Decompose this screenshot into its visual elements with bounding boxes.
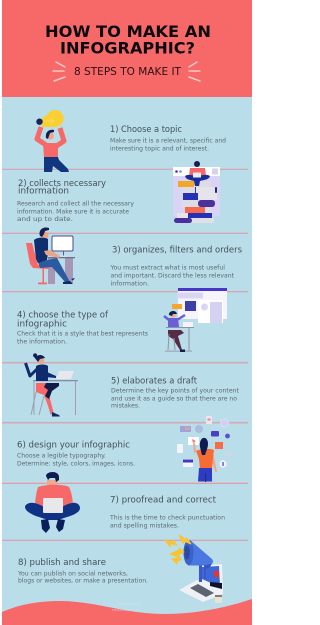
step 8 text xyxy=(17,557,148,584)
icon: person sitting cross-legged with laptop xyxy=(25,472,80,533)
title: HOW TO MAKE AN xyxy=(45,22,211,41)
step 6 text xyxy=(17,440,135,468)
watermark xyxy=(112,598,143,612)
icon: woman at laptop desk xyxy=(26,353,78,416)
step 3 text: and important. Discard the less relevant xyxy=(110,273,235,280)
step 7 text: 7) proofread and correct xyxy=(110,495,217,505)
dividers xyxy=(2,169,248,540)
step 2 text: 2) collects necessary xyxy=(18,178,106,188)
step 4 text: 4) choose the type of xyxy=(17,310,109,320)
step 6 text: 6) design your infographic xyxy=(17,440,130,450)
title: INFOGRAPHIC? xyxy=(60,38,195,58)
step 1 text xyxy=(110,124,226,152)
footer wave xyxy=(2,599,252,625)
step 1 text: 1) Choose a topic xyxy=(110,124,182,134)
step 2 text: information xyxy=(18,186,69,196)
step 3 text xyxy=(109,245,242,288)
step 4 text: the information. xyxy=(17,338,67,345)
step 3 text: information. xyxy=(110,281,149,288)
icon: right sparkle strokes xyxy=(189,62,200,81)
step 8 text: You can publish on social networks, xyxy=(17,570,128,577)
step 5 text xyxy=(111,375,240,410)
step 7 text: and spelling mistakes. xyxy=(110,523,179,530)
step 7 text: This is the time to check punctuation xyxy=(109,515,225,522)
step 2 text: information. Make sure it is accurate xyxy=(17,209,129,216)
header panel xyxy=(2,0,252,97)
step 1 text: Make sure it is a relevant, specific and xyxy=(110,138,226,144)
step 8 text: blogs or websites, or make a presentation. xyxy=(18,577,148,584)
icon: left sparkle strokes xyxy=(53,62,65,81)
icon: person with infographic layouts xyxy=(164,288,227,352)
step 2 text xyxy=(17,178,134,223)
icon: person at desktop computer xyxy=(26,227,75,284)
page background xyxy=(2,0,252,625)
icon: woman with floating design elements xyxy=(177,416,232,482)
step 5 text: 5) elaborates a draft xyxy=(111,375,198,385)
step 5 text: and use it as a guide so that there are no xyxy=(111,396,237,403)
step 2 text: Research and collect all the necessary xyxy=(17,201,134,208)
step 8 text: 8) publish and share xyxy=(18,557,106,567)
step 5 text: mistakes. xyxy=(111,403,140,410)
title xyxy=(45,22,211,58)
step 6 text: Determine: style, colors, images, icons. xyxy=(17,461,135,468)
watermark: مستقل xyxy=(112,598,142,607)
icon: person on book stack xyxy=(173,161,220,223)
step 4 text xyxy=(17,310,148,345)
step 3 text: You must extract what is most useful xyxy=(109,265,225,272)
step 4 text: infographic xyxy=(17,319,67,329)
icon: person holding light bulb xyxy=(36,110,69,172)
step 6 text: Choose a legible typography. xyxy=(17,453,106,460)
step 2 text: and up to date. xyxy=(17,216,73,223)
step 3 text: 3) organizes, filters and orders xyxy=(112,245,242,255)
subtitle: 8 STEPS TO MAKE IT xyxy=(74,66,182,78)
step 5 text: Determine the key points of your content xyxy=(111,388,240,395)
watermark: mostaql.com xyxy=(112,608,143,612)
step 1 text: interesting topic and of interest. xyxy=(110,145,209,152)
icon: megaphone and laptop xyxy=(165,535,223,603)
step 4 text: Check that it is a style that best represents xyxy=(17,330,148,337)
step 7 text xyxy=(109,495,225,530)
